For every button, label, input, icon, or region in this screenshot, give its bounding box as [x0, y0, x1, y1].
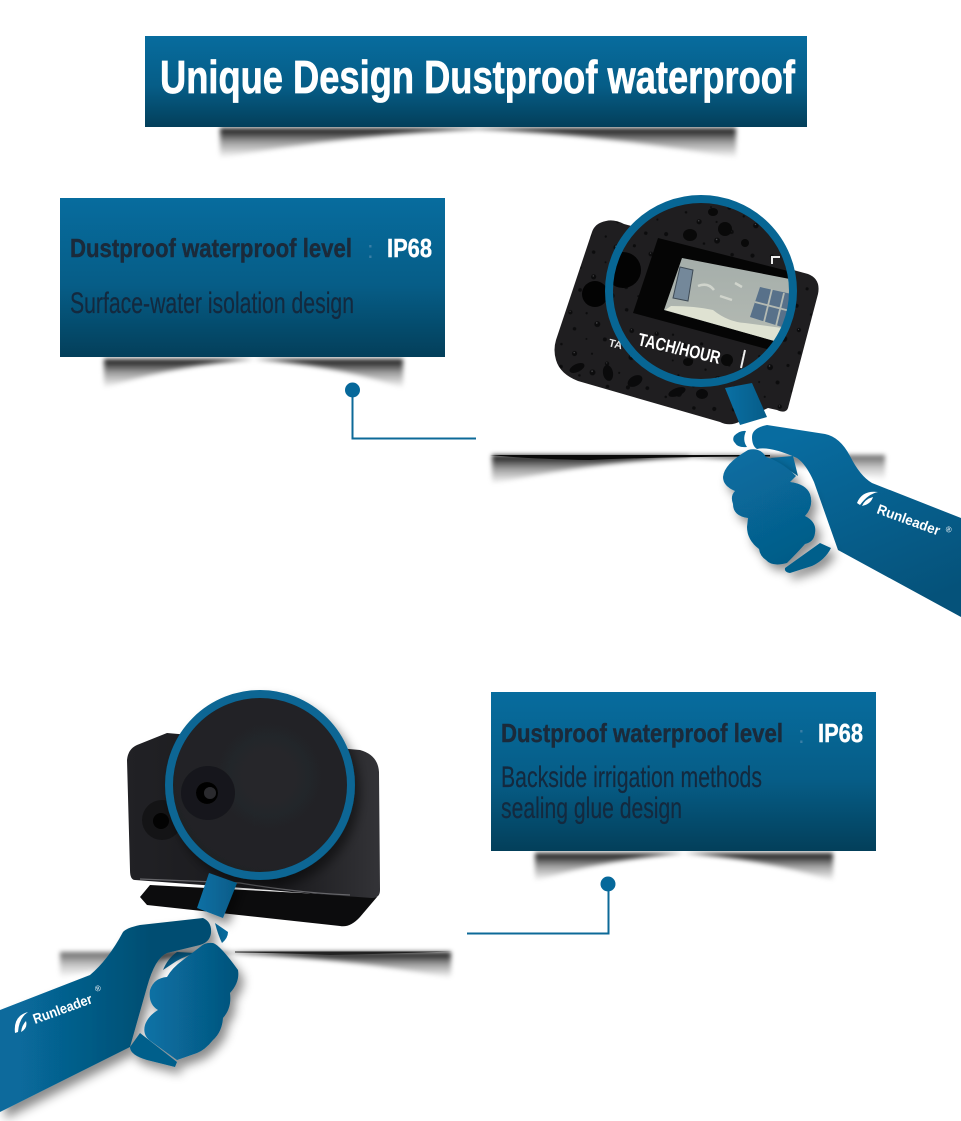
little finger — [130, 1033, 177, 1067]
lens ring — [609, 199, 793, 383]
hole in lens — [613, 252, 641, 288]
description line 1: Backside irrigation methods — [501, 761, 762, 794]
panel heading: Dustproof waterproof level — [70, 233, 352, 263]
little finger — [785, 543, 831, 573]
left shadow — [492, 455, 690, 484]
hand 2 — [0, 918, 238, 1112]
water patch on lcd — [665, 306, 782, 342]
thumb tip — [733, 431, 747, 447]
panel description: Surface-water isolation design — [70, 287, 354, 320]
device photo 1: wet tachometer — [554, 220, 819, 424]
lcd digits — [750, 287, 789, 327]
lcd small water marks — [698, 283, 742, 300]
thumb tip — [215, 923, 228, 943]
mounting clip — [140, 885, 377, 926]
logo 1 — [857, 492, 953, 539]
title banner background — [145, 36, 807, 127]
device body — [127, 733, 380, 898]
panel background — [491, 692, 876, 851]
tach hour label: TACH/HOUR — [636, 329, 722, 368]
arm and forefinger — [0, 918, 211, 1112]
device body — [554, 220, 819, 424]
lens fill — [169, 694, 351, 876]
display window — [633, 238, 800, 352]
corner mark — [772, 257, 780, 264]
lcd — [664, 258, 800, 342]
panel: surface-water isolation — [60, 198, 445, 388]
large droplets along lower edge — [568, 361, 708, 399]
logo 2 — [15, 983, 102, 1033]
panel background — [60, 198, 445, 357]
magnifier 2 — [169, 694, 351, 918]
logo mark — [857, 492, 878, 506]
handle — [725, 383, 767, 425]
outer hole — [142, 800, 182, 840]
lcd digit gaps — [755, 289, 790, 326]
connector dot — [600, 876, 616, 892]
outer hole inner — [153, 813, 169, 829]
lens background — [639, 203, 786, 268]
connector line — [352, 390, 476, 438]
panel: backside sealing — [491, 692, 876, 881]
fist and little finger — [723, 449, 831, 573]
panel shadow — [535, 853, 833, 881]
title banner shadow — [220, 128, 736, 158]
inner finger — [770, 456, 798, 476]
logo mark — [15, 1012, 28, 1033]
label TA: TA — [607, 337, 624, 352]
shelf shadow 2 — [60, 952, 452, 978]
connector line — [467, 884, 608, 934]
dark edge — [490, 455, 770, 460]
large droplets — [683, 208, 749, 366]
registered mark: ® — [944, 524, 953, 535]
connector 2 — [467, 876, 616, 934]
colon: : — [367, 237, 374, 264]
sealing highlight — [140, 879, 350, 895]
hand 1 — [723, 425, 961, 617]
dark edge — [235, 952, 452, 955]
connector dot — [345, 382, 360, 398]
connector 1 — [345, 382, 476, 438]
rating: IP68 — [818, 718, 863, 748]
shelf shadow 1 — [490, 455, 885, 484]
mounting hole — [582, 281, 608, 307]
panel heading: Dustproof waterproof level — [501, 718, 783, 748]
lens view — [613, 203, 789, 368]
fist — [144, 943, 238, 1060]
colon: : — [798, 722, 805, 749]
lens hole centre — [204, 787, 216, 799]
right shadow — [690, 455, 885, 480]
inner finger — [163, 952, 195, 970]
fist — [723, 449, 815, 564]
forefinger and arm — [752, 425, 961, 617]
left shadow — [60, 952, 235, 978]
handle — [197, 873, 237, 918]
right shadow — [235, 952, 451, 978]
brand name: Runleader — [875, 501, 943, 539]
tick mark — [741, 350, 745, 368]
lens hole ring — [181, 766, 235, 820]
lens hole — [196, 782, 218, 804]
device photo 2: back side — [127, 733, 380, 926]
title: Unique Design Dustproof waterproof — [160, 51, 796, 103]
registered mark: ® — [94, 983, 102, 994]
panel shadow — [104, 359, 403, 388]
rating: IP68 — [387, 233, 432, 263]
magnifier 1 — [600, 190, 800, 425]
fist and little finger — [130, 943, 238, 1067]
lens ring — [169, 694, 351, 876]
description line 2: sealing glue design — [501, 792, 682, 825]
brand name: Runleader — [31, 990, 95, 1027]
lcd icon — [673, 267, 693, 301]
title banner — [145, 36, 807, 158]
